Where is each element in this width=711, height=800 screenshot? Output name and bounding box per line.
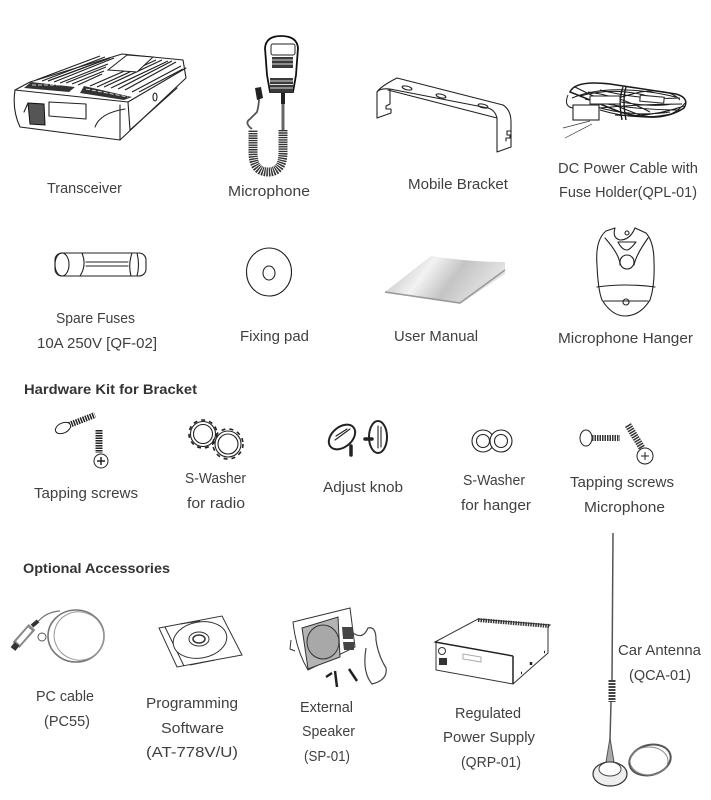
label: PC cable: (PC55) bbox=[44, 713, 90, 730]
label: External Speaker bbox=[300, 699, 355, 765]
label: External Speaker: External bbox=[300, 699, 353, 716]
icon: external speaker bbox=[290, 608, 386, 687]
label: Programming Software: Software bbox=[161, 720, 224, 737]
label: Regulated Power Supply: Power Supply bbox=[443, 729, 535, 746]
label: DC Power Cable bbox=[558, 160, 698, 201]
label: External Speaker: Speaker bbox=[302, 723, 355, 740]
icon: tapping screws bbox=[54, 415, 108, 468]
icon: spare fuse bbox=[55, 253, 146, 276]
label: Regulated Power Supply: (QRP-01) bbox=[461, 754, 521, 771]
icon: regulated power supply bbox=[435, 619, 550, 684]
label: Programming Software: Programming bbox=[146, 695, 238, 712]
label: DC Power Cable: Fuse Holder(QPL-01) bbox=[559, 184, 697, 201]
label: Tapping screws Microphone: Tapping screws bbox=[570, 474, 674, 491]
label: S-Washer for hanger: for hanger bbox=[461, 497, 531, 514]
icon: S-washers for hanger bbox=[472, 430, 512, 452]
label: Car Antenna bbox=[618, 642, 702, 684]
icon: tapping screws microphone bbox=[580, 425, 653, 464]
label: DC Power Cable: DC Power Cable with bbox=[558, 160, 698, 177]
icon: fixing pad bbox=[246, 248, 292, 296]
label: Regulated Power Supply bbox=[443, 705, 535, 771]
label: Car Antenna: Car Antenna bbox=[618, 642, 702, 659]
icon: adjust knob bbox=[324, 420, 387, 455]
label: PC cable: PC cable bbox=[36, 688, 94, 705]
label: External Speaker: (SP-01) bbox=[304, 748, 350, 765]
label: Spare Fuses: 10A 250V [QF-02] bbox=[37, 335, 157, 352]
label: Microphone Hanger: Microphone Hanger bbox=[558, 330, 693, 347]
icon: car antenna bbox=[593, 533, 674, 786]
icon: S-washers for radio bbox=[189, 420, 243, 459]
label: S-Washer for radio bbox=[185, 470, 246, 512]
label: Spare Fuses: Spare Fuses bbox=[56, 310, 135, 327]
label: Mobile Bracket: Mobile Bracket bbox=[408, 176, 509, 193]
icon: DC power cable bbox=[563, 83, 686, 138]
label: Adjust knob: Adjust knob bbox=[323, 479, 403, 496]
icon: user manual bbox=[385, 256, 505, 304]
label: Programming Software: (AT-778V/U) bbox=[146, 744, 238, 761]
label: Regulated Power Supply: Regulated bbox=[455, 705, 521, 722]
icon: microphone hanger bbox=[597, 228, 655, 316]
label: User Manual: User Manual bbox=[394, 328, 478, 345]
heading: optional accessories: Optional Accessories bbox=[23, 560, 170, 576]
icon: PC cable bbox=[13, 605, 111, 667]
label: Transceiver: Transceiver bbox=[47, 180, 122, 197]
label: PC cable bbox=[36, 688, 94, 730]
icon: programming software CD bbox=[159, 616, 242, 667]
label: Programming Software bbox=[146, 695, 238, 761]
label: S-Washer for hanger bbox=[461, 472, 531, 514]
icon: microphone bbox=[247, 36, 298, 172]
icon: transceiver bbox=[14, 54, 186, 140]
label: Microphone: Microphone bbox=[228, 183, 310, 200]
label: Spare Fuses bbox=[37, 310, 157, 352]
label: S-Washer for radio: S-Washer bbox=[185, 470, 246, 487]
label: Tapping screws Microphone bbox=[570, 474, 674, 516]
label: Fixing pad: Fixing pad bbox=[240, 328, 309, 345]
label: Tapping screws: Tapping screws bbox=[34, 485, 138, 502]
icon: mobile bracket bbox=[377, 78, 511, 152]
label: Tapping screws Microphone: Microphone bbox=[584, 499, 665, 516]
label: Car Antenna: (QCA-01) bbox=[629, 667, 691, 684]
label: S-Washer for radio: for radio bbox=[187, 495, 245, 512]
label: S-Washer for hanger: S-Washer bbox=[463, 472, 525, 489]
heading: hardware kit: Hardware Kit for Bracket bbox=[24, 381, 197, 397]
